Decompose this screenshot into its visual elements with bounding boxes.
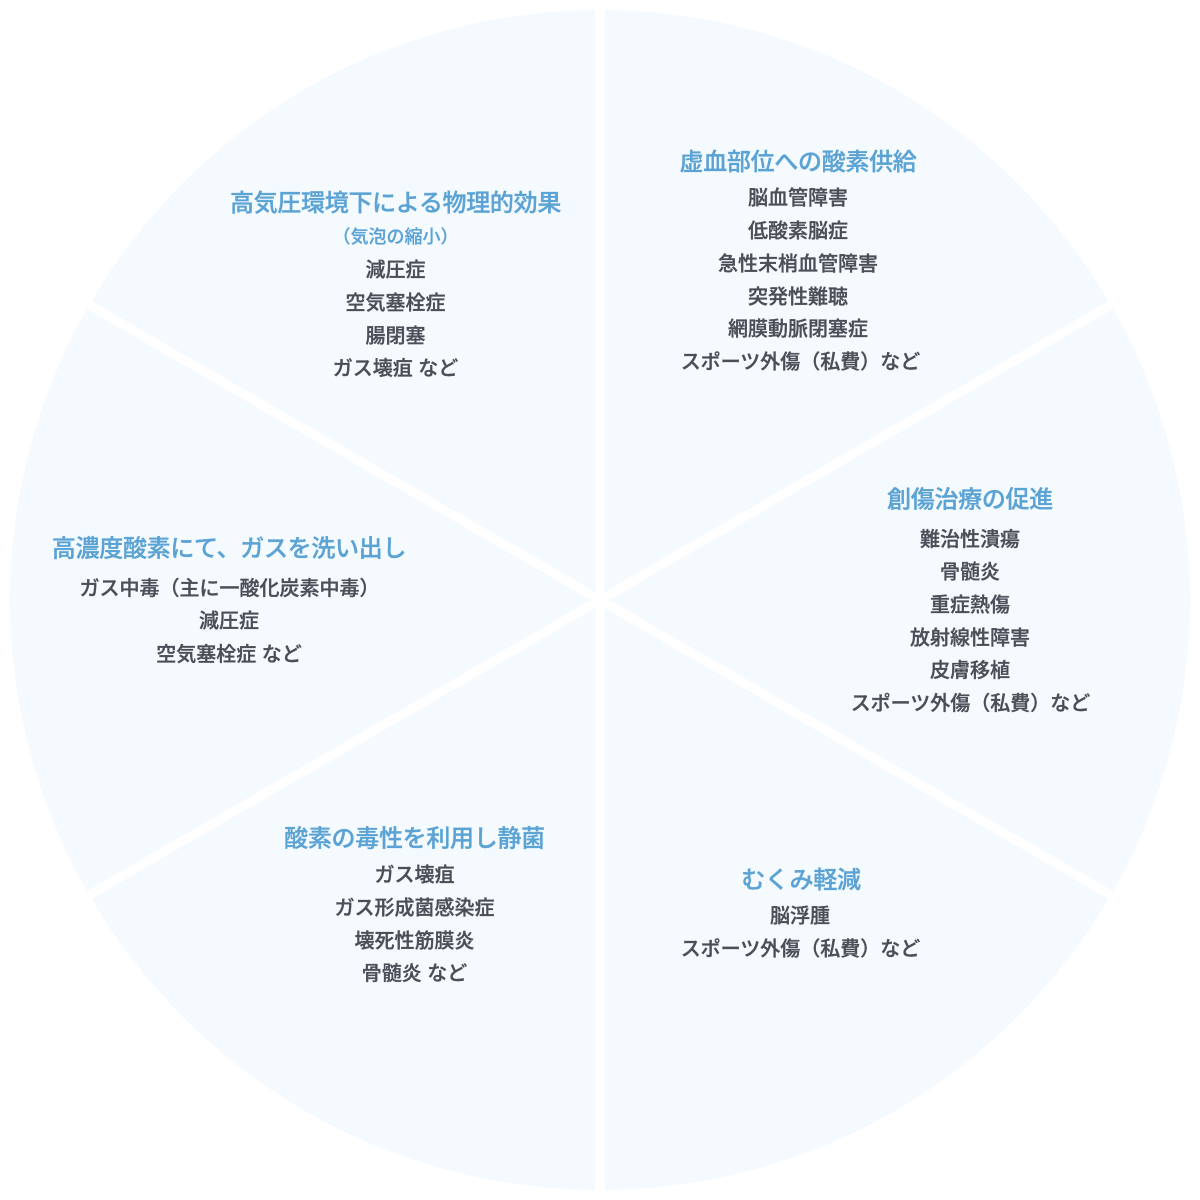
panel: oxygen supply to ischemic sites bbox=[600, 10, 1111, 600]
heading: gas washout: 高濃度酸素にて、ガスを洗い出し bbox=[52, 536, 406, 562]
list: physical effect conditions bbox=[333, 258, 458, 380]
list: ischemic conditions bbox=[681, 186, 920, 374]
panel: wound healing bbox=[600, 305, 1190, 895]
list: ischemic conditions: スポーツ外傷（私費）など bbox=[681, 350, 920, 374]
list: ischemic conditions: 低酸素脳症 bbox=[748, 220, 848, 242]
heading: wound healing promotion: 創傷治療の促進 bbox=[887, 486, 1053, 514]
heading: physical effect: 高気圧環境下による物理的効果 bbox=[230, 190, 561, 217]
subheading: bubble shrinkage: （気泡の縮小） bbox=[332, 227, 458, 247]
list: physical effect conditions: 空気塞栓症 bbox=[346, 292, 446, 314]
list: gas conditions: 空気塞栓症 など bbox=[156, 643, 302, 666]
list: gas conditions bbox=[80, 577, 380, 666]
list: physical effect conditions: ガス壊疽 など bbox=[333, 357, 458, 380]
list: physical effect conditions: 腸閉塞 bbox=[366, 324, 426, 348]
list: infection conditions bbox=[334, 864, 494, 985]
list: wound conditions bbox=[851, 528, 1090, 715]
list: wound conditions: 皮膚移植 bbox=[930, 659, 1010, 682]
list: gas conditions: 減圧症 bbox=[199, 610, 259, 632]
list: ischemic conditions: 脳血管障害 bbox=[748, 186, 848, 210]
list: infection conditions: ガス壊疽 bbox=[374, 864, 454, 886]
list: infection conditions: 骨髄炎 など bbox=[362, 962, 467, 985]
list: edema conditions: スポーツ外傷（私費）など bbox=[681, 938, 920, 960]
list: wound conditions: 放射線性障害 bbox=[910, 626, 1030, 650]
panel: gas washout bbox=[10, 305, 600, 895]
list: gas conditions: ガス中毒（主に一酸化炭素中毒） bbox=[80, 577, 380, 600]
list: wound conditions: 重症熱傷 bbox=[930, 594, 1010, 616]
panel: bactericidal oxygen toxicity bbox=[89, 600, 600, 1190]
list: infection conditions: ガス形成菌感染症 bbox=[334, 896, 494, 920]
list: ischemic conditions: 突発性難聴 bbox=[748, 286, 848, 308]
list: infection conditions: 壊死性筋膜炎 bbox=[354, 930, 474, 952]
list: ischemic conditions: 網膜動脈閉塞症 bbox=[728, 318, 868, 340]
list: wound conditions: 難治性潰瘍 bbox=[920, 528, 1020, 551]
list: ischemic conditions: 急性末梢血管障害 bbox=[718, 252, 878, 276]
list: wound conditions: スポーツ外傷（私費）など bbox=[851, 692, 1090, 715]
list: edema conditions bbox=[681, 904, 920, 960]
heading: ischemic oxygen supply: 虚血部位への酸素供給 bbox=[680, 149, 917, 176]
panel: hyperbaric physical effect bbox=[89, 10, 600, 600]
list: wound conditions: 骨髄炎 bbox=[940, 560, 1000, 584]
list: edema conditions: 脳浮腫 bbox=[770, 904, 830, 928]
heading: oxygen toxicity: 酸素の毒性を利用し静菌 bbox=[284, 826, 545, 852]
list: physical effect conditions: 減圧症 bbox=[366, 258, 426, 282]
heading: edema reduction: むくみ軽減 bbox=[741, 867, 861, 894]
panel: edema reduction bbox=[600, 600, 1111, 1190]
